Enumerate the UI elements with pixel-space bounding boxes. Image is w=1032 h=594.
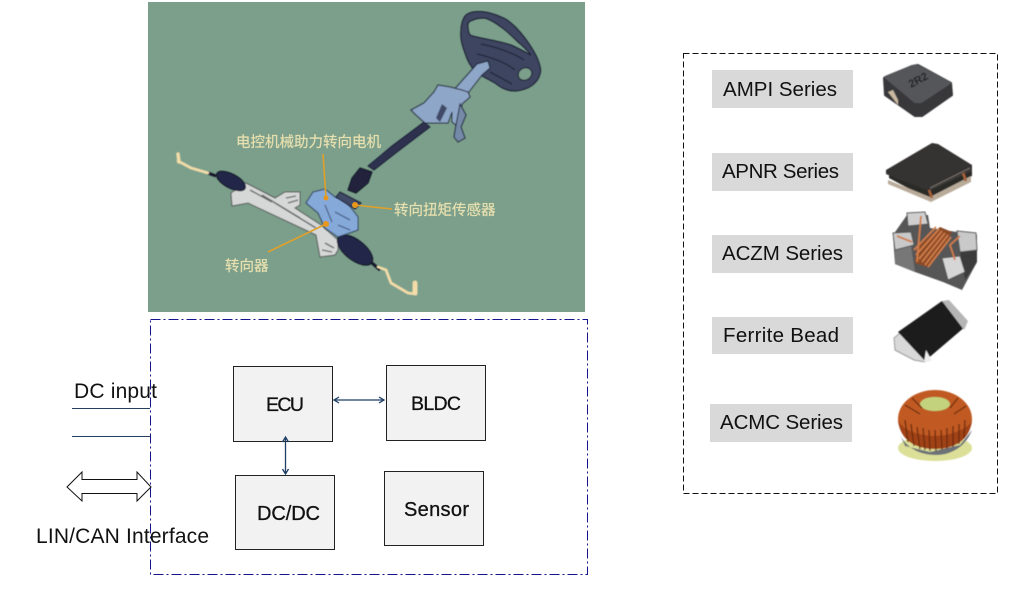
icon: ferrite bead — [894, 300, 968, 362]
arrow: ECU to DC/DC — [282, 437, 288, 474]
block: Sensor — [384, 472, 484, 546]
icon: ACMC toroid choke — [898, 390, 972, 461]
panel: steering system illustration — [148, 2, 585, 312]
label: AMPI Series: AMPI Series — [723, 78, 837, 101]
block: ECU — [234, 366, 332, 442]
block: DC/DC: DC/DC — [257, 503, 320, 525]
icon: steering wheel — [461, 11, 541, 91]
icon: AMPI inductor: 2R2 — [907, 71, 930, 91]
block: Sensor: Sensor — [404, 499, 469, 521]
icon: APNR inductor — [886, 143, 972, 202]
label: LIN/CAN interface: LIN/CAN Interface — [36, 525, 209, 548]
icon: ACZM common mode choke — [893, 212, 977, 290]
callout lines — [268, 154, 392, 252]
label: ACMC Series — [710, 404, 852, 442]
label: Ferrite Bead — [712, 317, 853, 354]
panel: control module boundary — [150, 320, 588, 574]
arrow: ECU to BLDC — [334, 397, 384, 403]
block: DC/DC — [236, 476, 334, 550]
label: motor: 电控机械助力转向电机 — [236, 134, 381, 151]
block: ECU: ECU — [266, 394, 304, 416]
icon: AMPI inductor — [884, 65, 952, 116]
block: BLDC — [386, 366, 486, 440]
block: BLDC: BLDC — [411, 393, 461, 415]
label: AMPI Series — [712, 70, 853, 108]
panel: inductor series — [684, 54, 998, 494]
icon: steering column — [348, 61, 490, 193]
icon: steering rack — [208, 167, 380, 271]
label: APNR Series: APNR Series — [722, 160, 839, 183]
label: steering gear: 转向器 — [225, 258, 269, 275]
wires: DC input — [72, 408, 150, 436]
icon: tie rods — [178, 154, 416, 294]
label: ACZM Series — [712, 235, 853, 273]
label: torque sensor: 转向扭矩传感器 — [394, 202, 496, 219]
icon: assist motor — [306, 189, 358, 237]
icon: torque sensor ring — [336, 192, 361, 209]
label: Ferrite Bead: Ferrite Bead — [723, 324, 839, 347]
label: DC input: DC input — [74, 380, 157, 403]
label: ACZM Series: ACZM Series — [722, 242, 843, 265]
arrow: LIN/CAN interface — [67, 472, 151, 501]
label: APNR Series — [712, 153, 853, 191]
label: ACMC Series: ACMC Series — [720, 411, 843, 434]
